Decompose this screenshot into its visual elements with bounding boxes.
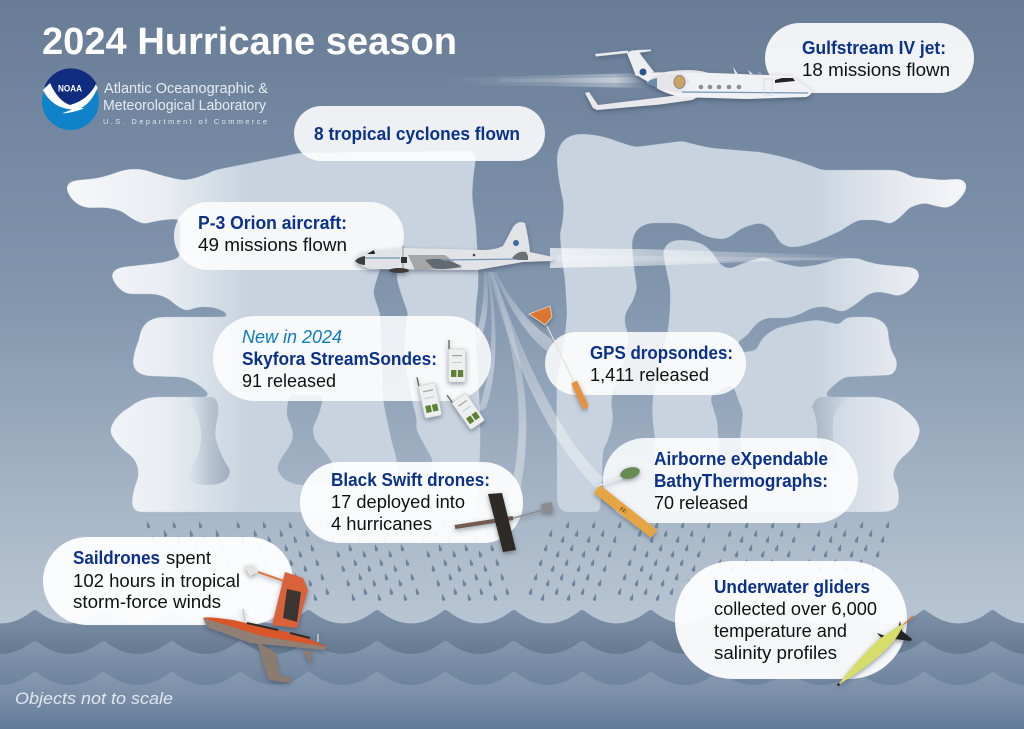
logo text — [103, 81, 268, 126]
callout: Skyfora StreamSondes: 91 released — [242, 371, 336, 391]
wave layer 3 — [0, 671, 1024, 729]
callout: Airborne eXpendable BathyThermographs: BathyThermographs: — [654, 471, 828, 491]
icon: Black Swift drone — [455, 493, 553, 552]
callout: Airborne eXpendable BathyThermographs — [603, 438, 858, 523]
parachute — [529, 306, 552, 325]
logo text: Meteorological Laboratory — [103, 98, 267, 114]
wave layer 2 — [0, 640, 1024, 729]
release swooshes from P-3 — [470, 272, 604, 510]
title: 2024 Hurricane season — [42, 21, 457, 63]
callout: Airborne eXpendable BathyThermographs: Airborne eXpendable — [654, 449, 828, 469]
callout: Gulfstream IV jet — [765, 23, 974, 93]
cloud shading: left — [183, 397, 230, 485]
icon: NOAA emblem: NOAA — [58, 84, 82, 94]
cloud gap: left — [277, 395, 338, 485]
callout: Skyfora StreamSondes — [213, 316, 491, 401]
icon: GPS dropsonde — [529, 306, 586, 408]
icon: underwater glider — [837, 616, 913, 686]
logo text: U.S. Department of Commerce — [103, 117, 267, 126]
cloud shading: right — [812, 397, 853, 473]
callout: Saildrones: spent — [166, 548, 211, 568]
callout: tropical cyclones — [294, 106, 545, 161]
callout: P-3 Orion aircraft: P-3 Orion aircraft: — [198, 213, 347, 233]
cloud: left half — [66, 151, 480, 512]
callout: Underwater gliders: Underwater gliders — [714, 577, 870, 597]
callout: Airborne eXpendable BathyThermographs: 70 released — [654, 493, 748, 513]
icon: Skyfora StreamSondes — [416, 340, 485, 430]
logo text: Atlantic Oceanographic & — [104, 81, 268, 97]
cloud gap: right — [710, 385, 745, 480]
callout: P-3 Orion aircraft — [174, 202, 404, 270]
icon: Gulfstream IV jet — [585, 50, 812, 110]
callout: Gulfstream IV jet: 18 missions flown — [802, 60, 950, 80]
callout: Black Swift drones — [300, 462, 523, 543]
callout: GPS dropsondes — [545, 332, 746, 395]
callout: Underwater gliders: collected over 6,000 — [714, 599, 877, 619]
wave layer 1 — [0, 609, 1024, 729]
callout: Underwater gliders: temperature and — [714, 621, 847, 641]
callout: Saildrones: Saildrones — [73, 548, 160, 568]
icon: Saildrone — [203, 565, 327, 682]
sonde tube — [574, 382, 586, 408]
cloud gap: centre left — [373, 255, 433, 485]
callout: Gulfstream IV jet: Gulfstream IV jet: — [802, 38, 946, 58]
icon: NOAA emblem — [42, 68, 99, 130]
rain — [147, 521, 889, 601]
callout: Black Swift drones: 4 hurricanes — [331, 514, 432, 534]
icon: P-3 Orion aircraft — [355, 222, 554, 274]
cloud: right column and top lobe — [556, 134, 966, 512]
NOAA AOML logo — [42, 68, 268, 130]
callout: Skyfora StreamSondes: New in 2024 — [242, 327, 342, 347]
callout: tropical cyclones: 8 tropical cyclones flown — [314, 124, 520, 144]
callout: GPS dropsondes: 1,411 released — [590, 365, 709, 385]
note: not to scale: Objects not to scale — [15, 689, 173, 708]
callout: Saildrones: storm-force winds — [73, 592, 221, 612]
callout: Saildrones — [43, 537, 293, 625]
callout: Saildrones: 102 hours in tropical — [73, 571, 240, 591]
hurricane clouds — [66, 134, 966, 512]
callout: Underwater gliders — [675, 561, 907, 679]
icon: AXBT — [597, 465, 654, 534]
callout: Black Swift drones: 17 deployed into — [331, 492, 465, 512]
cloud: right lower lobes — [652, 240, 920, 512]
contrail: Gulfstream — [445, 73, 645, 88]
callout: Black Swift drones: Black Swift drones: — [331, 470, 490, 490]
callout: P-3 Orion aircraft: 49 missions flown — [198, 235, 347, 255]
callout: GPS dropsondes: GPS dropsondes: — [590, 343, 733, 363]
callout: Underwater gliders: salinity profiles — [714, 643, 837, 663]
sea waves — [0, 609, 1024, 729]
callout: Skyfora StreamSondes: Skyfora StreamSondes: — [242, 349, 437, 369]
contrail: P-3 — [550, 248, 860, 268]
